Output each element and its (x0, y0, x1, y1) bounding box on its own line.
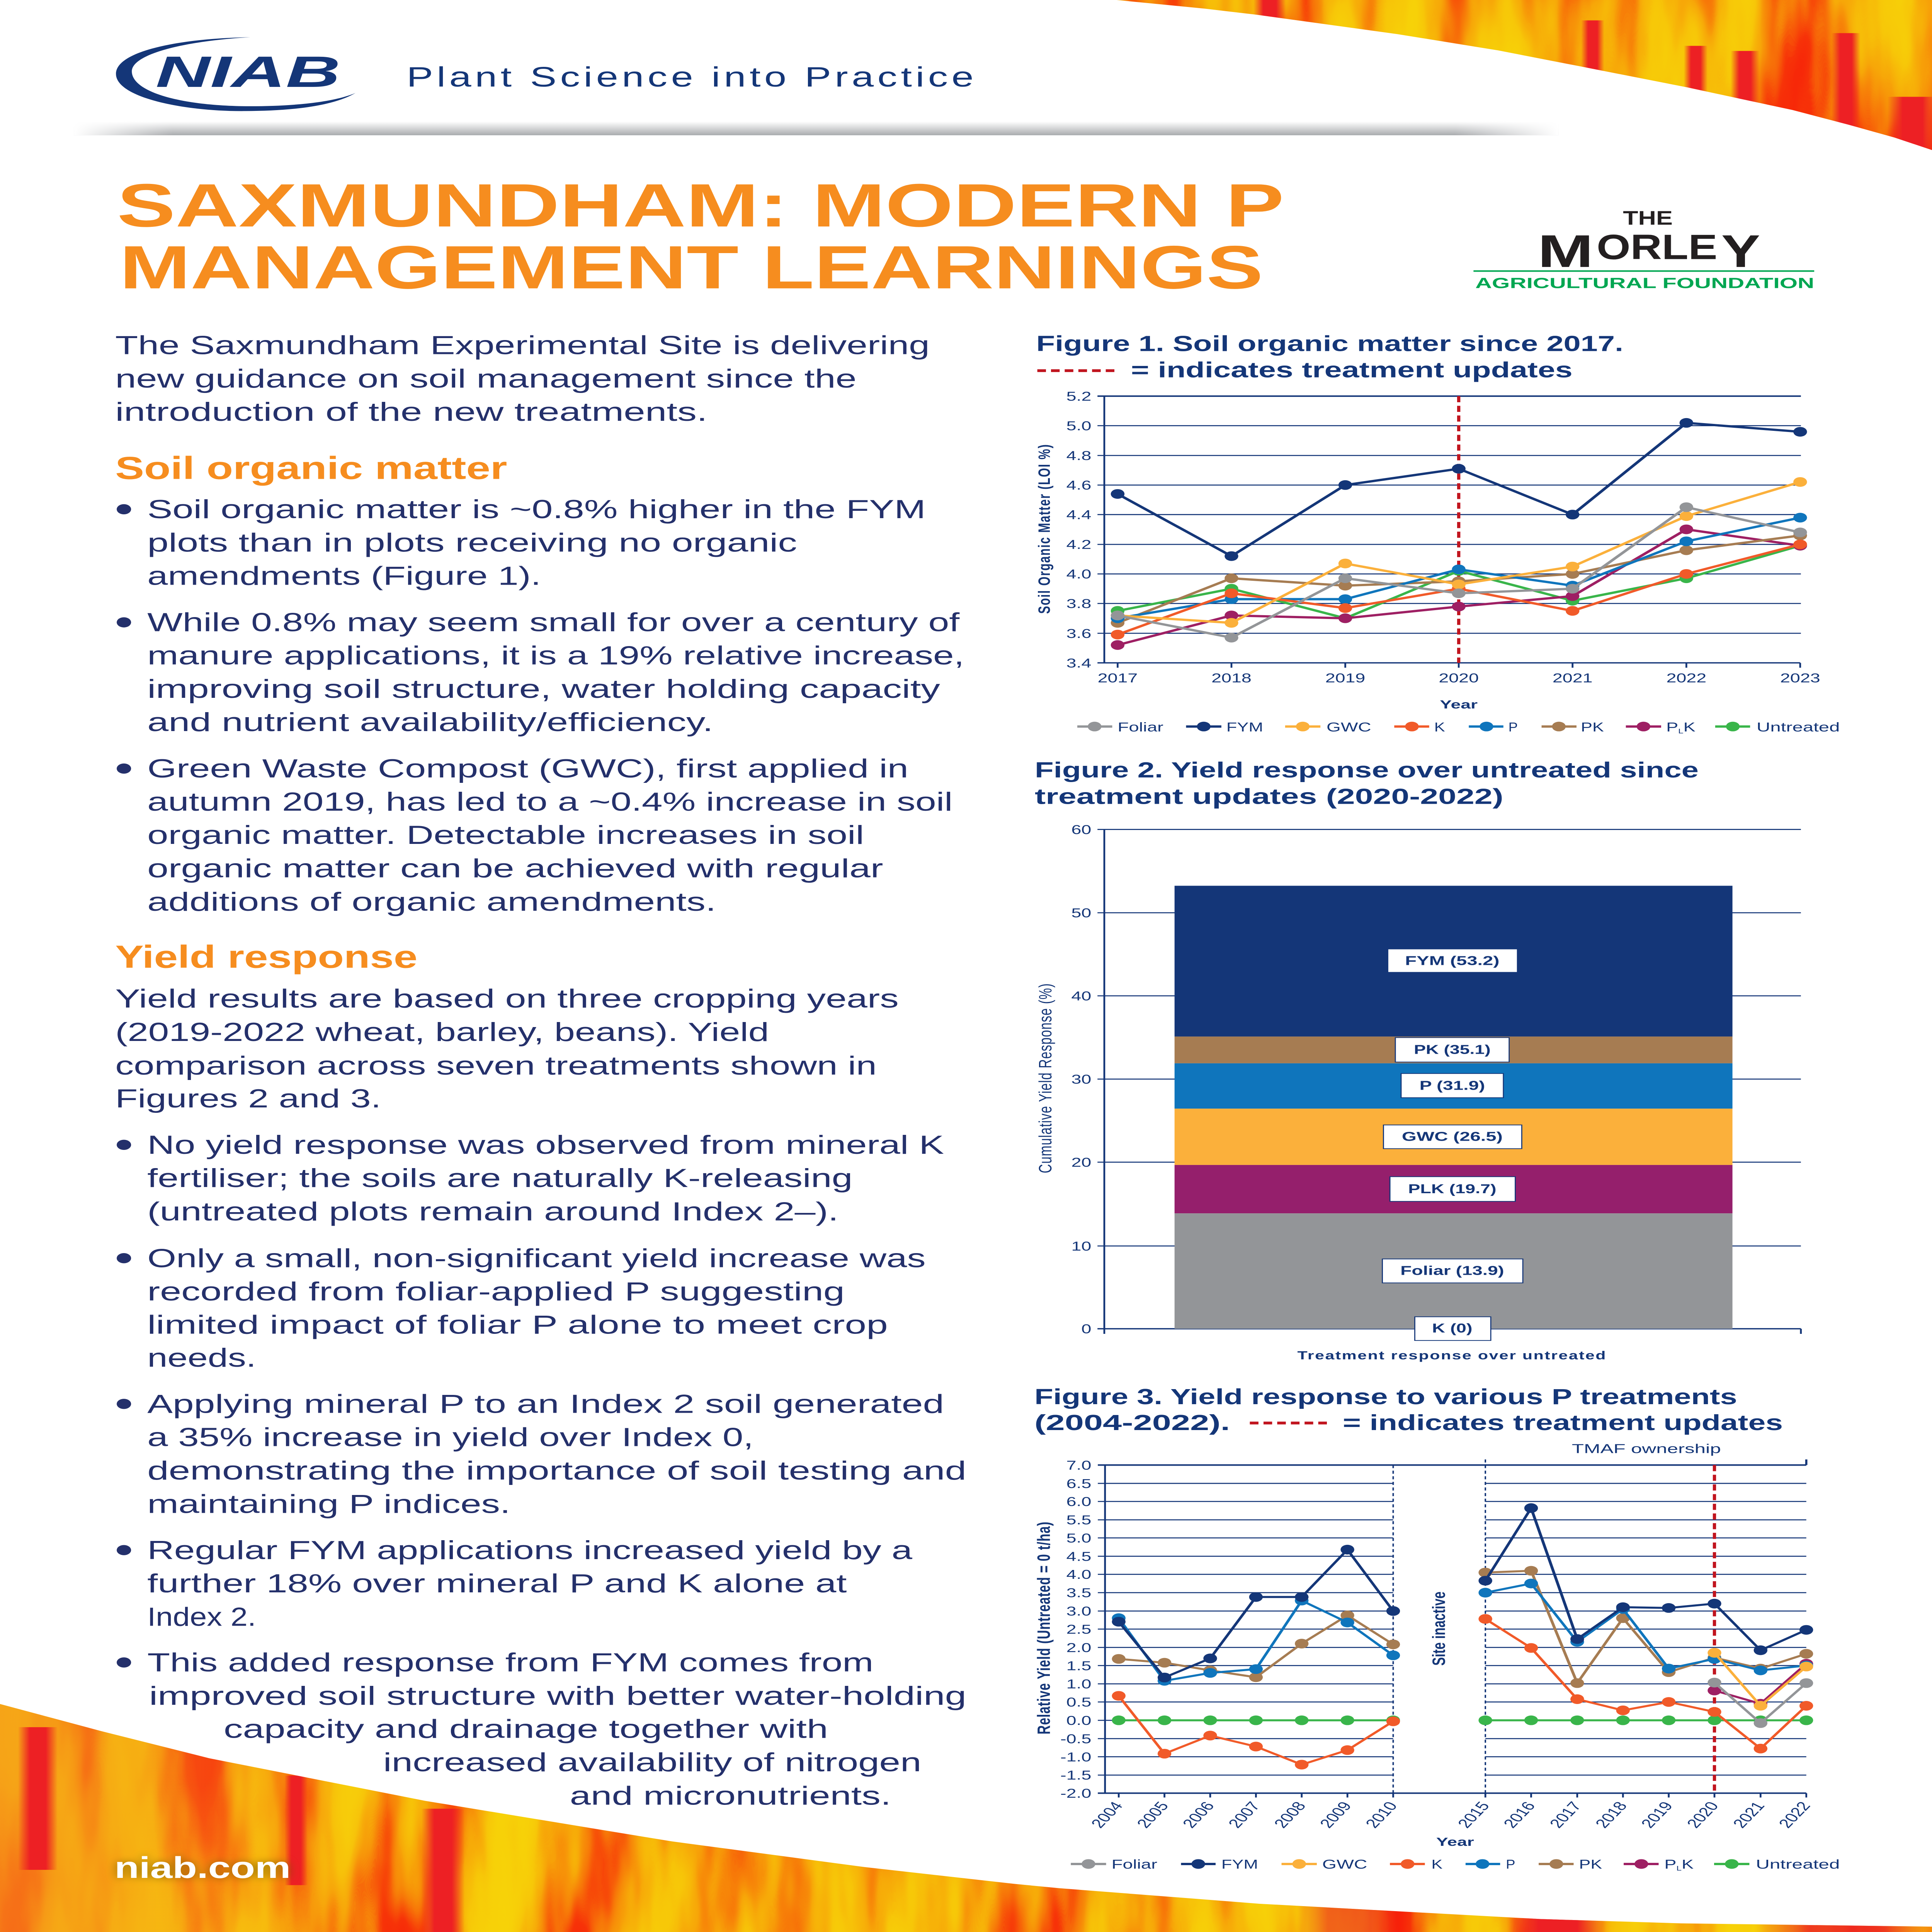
figure 1 axis titles: Soil Organic Matter (LOI %) (1035, 444, 1053, 614)
figure 2 y tick labels: 0 (1081, 1321, 1091, 1336)
figure 3 x tick labels: 2008 (1270, 1799, 1310, 1830)
figure 3 y tick labels: 0.0 (1066, 1713, 1091, 1728)
figure 2 axes and grid (1097, 830, 1801, 1334)
figure 3 legend: Untreated (1756, 1857, 1840, 1871)
series: P (1111, 513, 1807, 623)
title: SAXMUNDHAM: MODERN P (117, 172, 1284, 240)
figure 3 heading: = indicates treatment updates (1343, 1410, 1783, 1435)
figure 1 y tick labels: 3.6 (1066, 626, 1091, 641)
soil organic matter bullets: Green Waste Compost (GWC), first applied in (147, 754, 908, 783)
figure 1 legend: Untreated (1757, 720, 1840, 734)
figure 3 x tick labels: 2009 (1316, 1799, 1355, 1830)
background wheat image bottom (0, 1702, 1932, 1932)
Morley logo: AGRICULTURAL FOUNDATION (1475, 275, 1814, 291)
figure 1 y tick labels: 4.4 (1066, 507, 1091, 522)
figure 3 y tick labels: 3.5 (1066, 1585, 1091, 1600)
figure 1 heading: Figure 1. Soil organic matter since 2017. (1036, 331, 1623, 356)
bar label: PLK: PLK (19.7) (1408, 1182, 1497, 1196)
yield response bullets: recorded from foliar-applied P suggesting (147, 1277, 845, 1306)
yield response bullets: increased availability of nitrogen (383, 1748, 921, 1777)
figure 1 legend: PK (1581, 720, 1604, 734)
bar label: GWC: GWC (26.5) (1402, 1129, 1503, 1144)
figure 1 y tick labels (1066, 389, 1091, 670)
yield response bullets: improved soil structure with better water-holding (149, 1681, 966, 1711)
figure 3 legend: GWC (1322, 1857, 1367, 1871)
figure 3 heading: (2004-2022). (1034, 1410, 1230, 1435)
bar label: PLK (1390, 1177, 1515, 1201)
series: PK (1111, 531, 1807, 628)
figure 3 legend: P (1664, 1857, 1677, 1871)
series: Foliar (1111, 502, 1807, 643)
soil organic matter bullets: organic matter can be achieved with regular (147, 854, 883, 883)
soil organic matter bullets: and nutrient availability/efficiency. (147, 707, 713, 737)
figure 1 axes and grid (1097, 396, 1801, 668)
series: K (1112, 1614, 1813, 1769)
figure 1 y tick labels: 3.4 (1066, 656, 1091, 670)
figure 3 y tick labels: -1.5 (1060, 1768, 1091, 1782)
figure 2 axis titles: Cumulative Yield Response (%) (1035, 983, 1055, 1173)
intro text: The Saxmundham Experimental Site is delivering (115, 330, 930, 360)
series: GWC (1111, 477, 1807, 628)
yield response bullets: Only a small, non-significant yield increase was (147, 1243, 926, 1273)
figure 1 x tick labels (1098, 671, 1820, 685)
figure 3 x tick labels (1087, 1799, 1814, 1830)
figure 1 y tick labels: 3.8 (1066, 596, 1091, 611)
soil organic matter bullets: additions of organic amendments. (147, 887, 716, 917)
series: Foliar (1708, 1678, 1813, 1728)
intro text: introduction of the new treatments. (115, 397, 707, 427)
figure 2 heading: Figure 2. Yield response over untreated since (1035, 758, 1699, 782)
soil organic matter bullets: improving soil structure, water holding capacity (147, 674, 940, 703)
intro text: new guidance on soil management since the (115, 364, 857, 393)
figure 3 y tick labels: -1.0 (1060, 1750, 1091, 1764)
website link: niab.com (114, 1851, 291, 1884)
site inactive label: Site inactive (1429, 1592, 1449, 1666)
figure 3 x tick labels: 2007 (1224, 1799, 1264, 1830)
yield intro text: comparison across seven treatments shown in (115, 1051, 877, 1080)
bar label: FYM (1388, 949, 1517, 972)
figure 3 y tick labels: 5.5 (1066, 1513, 1091, 1527)
yield intro text: Figures 2 and 3. (115, 1084, 381, 1113)
figure 1 x tick labels: 2018 (1211, 671, 1252, 685)
figure 3 legend: FYM (1221, 1857, 1258, 1871)
figure 1 y tick labels: 4.8 (1066, 448, 1091, 463)
soil organic matter bullets: autumn 2019, has led to a ~0.4% increase in soil (147, 787, 953, 816)
figure 1 legend: FYM (1226, 720, 1263, 734)
soil organic matter bullets: amendments (Figure 1). (147, 561, 541, 590)
panel: figure 1 (1035, 331, 1840, 735)
Morley logo (1473, 207, 1814, 291)
intro text (115, 330, 930, 427)
figure 3 axis titles: Year (1436, 1835, 1474, 1849)
figure 3 y tick labels: 7.0 (1066, 1458, 1091, 1473)
NIAB logo (116, 37, 355, 111)
figure 1 heading: = indicates treatment updates (1131, 357, 1573, 382)
figure 1 legend: K (1684, 720, 1696, 734)
figure 3 y tick labels: 2.0 (1066, 1640, 1091, 1655)
figure 3 y tick labels: 0.5 (1066, 1695, 1091, 1709)
bar label: K: K (0) (1432, 1321, 1473, 1335)
bar label: Foliar (1383, 1259, 1523, 1283)
figure 2 y tick labels: 60 (1071, 822, 1091, 837)
figure 2 axis titles (1035, 983, 1605, 1362)
figure 3 x tick labels: 2005 (1133, 1799, 1172, 1830)
yield response bullets: capacity and drainage together with (224, 1714, 828, 1743)
series: PLK (1111, 524, 1807, 650)
figure 3 y tick labels: -2.0 (1060, 1786, 1091, 1801)
series: P (1112, 1579, 1813, 1685)
figure 3 x tick labels: 2020 (1683, 1799, 1723, 1830)
figure 1 legend: Foliar (1117, 720, 1163, 734)
figure 3 y tick labels: 1.0 (1066, 1677, 1091, 1691)
figure 2 heading: treatment updates (2020-2022) (1035, 784, 1503, 809)
heading: yield response: Yield response (115, 939, 417, 975)
yield response bullets: a 35% increase in yield over Index 0, (147, 1423, 753, 1452)
series: K (1111, 539, 1807, 639)
figure 1 x tick labels: 2020 (1439, 671, 1479, 685)
figure 3 x tick labels: 2010 (1361, 1799, 1401, 1830)
figure 3 legend: Foliar (1112, 1857, 1157, 1871)
yield response bullets: demonstrating the importance of soil testing and (147, 1456, 966, 1485)
yield intro text: (2019-2022 wheat, barley, beans). Yield (115, 1017, 769, 1047)
bar label: Foliar: Foliar (13.9) (1400, 1263, 1504, 1278)
figure 1 treatment update marker (1457, 396, 1461, 663)
figure 3 axis titles (1033, 1522, 1474, 1849)
figure 2 y tick labels: 10 (1071, 1239, 1091, 1253)
figure 3 y tick labels: 6.0 (1066, 1494, 1091, 1509)
yield response bullets: needs. (147, 1343, 256, 1372)
figure 1 legend (1077, 720, 1840, 735)
figure 3 legend: K (1682, 1857, 1694, 1871)
figure 3 axis titles: Relative Yield (Untreated = 0 t/ha) (1033, 1522, 1054, 1735)
series: Untreated (1112, 1716, 1813, 1725)
figure 3 heading: Figure 3. Yield response to various P treatments (1034, 1384, 1737, 1409)
figure 3 x tick labels: 2006 (1179, 1799, 1218, 1830)
figure 1 legend: GWC (1327, 720, 1371, 734)
logo wordmark: NIAB (156, 48, 340, 96)
TMAF ownership label: TMAF ownership (1572, 1441, 1721, 1456)
figure 3 x tick labels: 2021 (1729, 1799, 1769, 1830)
yield response bullets: Index 2. (147, 1602, 256, 1631)
soil organic matter bullets: plots than in plots receiving no organic (147, 528, 797, 557)
figure 3 y tick labels: 5.0 (1066, 1531, 1091, 1545)
figure 1 x tick labels: 2023 (1780, 671, 1820, 685)
yield response bullets: This added response from FYM comes from (147, 1648, 873, 1677)
series: PK (1112, 1566, 1813, 1688)
figure 3 x tick labels: 2022 (1774, 1799, 1814, 1830)
yield response bullets: No yield response was observed from mineral K (147, 1130, 944, 1160)
figure 3 y tick labels: 1.5 (1066, 1658, 1091, 1673)
figure 3 heading (1034, 1384, 1783, 1435)
figure 2 y tick labels: 20 (1071, 1155, 1091, 1170)
series: PLK (1708, 1659, 1813, 1709)
figure 1 x tick labels: 2019 (1325, 671, 1365, 685)
heading: soil organic matter: Soil organic matter (115, 451, 507, 486)
figure 2 axis titles: Treatment response over untreated (1298, 1349, 1605, 1362)
yield response bullets: (untreated plots remain around Index 2–). (147, 1197, 838, 1226)
series: GWC (1708, 1648, 1813, 1711)
stacked bar (1175, 886, 1733, 1329)
soil organic matter bullets: organic matter. Detectable increases in soil (147, 820, 864, 850)
yield intro text: Yield results are based on three cropping years (115, 984, 899, 1013)
figure 3 legend (1071, 1857, 1840, 1872)
figure 3 legend: L (1677, 1865, 1682, 1872)
yield response bullets (117, 1130, 966, 1810)
figure 3 y tick labels: 6.5 (1066, 1476, 1091, 1491)
title (117, 172, 1284, 302)
bar label: GWC (1383, 1125, 1522, 1149)
figure 3 y tick labels: 3.0 (1066, 1604, 1091, 1619)
yield response bullets: Applying mineral P to an Index 2 soil generated (147, 1389, 944, 1418)
background wheat image top right (1117, 0, 1932, 153)
figure 3 treatment update marker (1713, 1465, 1716, 1793)
figure 1 legend: P (1666, 720, 1678, 734)
panel: figure 2 (1035, 758, 1801, 1362)
yield response bullets: limited impact of foliar P alone to meet crop (147, 1310, 888, 1339)
yield response bullets: maintaining P indices. (147, 1489, 510, 1519)
figure 3 y tick labels: -0.5 (1060, 1731, 1091, 1746)
yield response bullets: and micronutrients. (570, 1781, 891, 1810)
figure 1 y tick labels: 4.6 (1066, 478, 1091, 492)
figure 3 y tick labels: 4.5 (1066, 1549, 1091, 1564)
figure 3 y tick labels: 4.0 (1066, 1567, 1091, 1582)
figure 3 axes and grid (1098, 1459, 1806, 1798)
figure 1 y tick labels: 5.0 (1066, 418, 1091, 433)
figure 1 y tick labels: 4.2 (1066, 537, 1091, 552)
figure 3 legend: K (1431, 1857, 1442, 1871)
soil organic matter bullets: While 0.8% may seem small for over a century of (147, 607, 960, 637)
Morley logo: ORLE (1597, 227, 1717, 267)
Morley logo: Y (1721, 225, 1760, 277)
series: FYM (1112, 1503, 1813, 1682)
title: MANAGEMENT LEARNINGS (119, 233, 1263, 302)
figure 1 legend: P (1509, 720, 1518, 734)
figure 3 x tick labels: 2017 (1545, 1799, 1585, 1830)
figure 1 legend: L (1678, 728, 1684, 735)
figure 3 x tick labels: 2016 (1499, 1799, 1539, 1830)
bar label: PK: PK (35.1) (1414, 1042, 1491, 1057)
yield intro text (115, 984, 899, 1113)
figure 1 x tick labels: 2017 (1098, 671, 1138, 685)
figure 2 y tick labels: 50 (1071, 906, 1091, 920)
figure 3 legend: P (1506, 1857, 1515, 1871)
yield response bullets: further 18% over mineral P and K alone at (147, 1569, 847, 1598)
soil organic matter bullets (117, 495, 964, 917)
figure 3 legend: PK (1579, 1857, 1602, 1871)
figure 2 heading (1035, 758, 1699, 809)
Morley logo: M (1537, 225, 1594, 277)
Morley logo: THE (1623, 207, 1673, 229)
figure 1 axis titles (1035, 444, 1478, 711)
figure 2 y tick labels: 30 (1071, 1072, 1091, 1087)
bar label: P (1401, 1073, 1503, 1098)
figure 1 legend: K (1434, 720, 1445, 734)
figure 1 y tick labels: 5.2 (1066, 389, 1091, 403)
figure 3 y tick labels (1060, 1458, 1091, 1801)
series: Untreated (1111, 541, 1807, 623)
series: FYM (1111, 418, 1807, 561)
bar label: K (1415, 1317, 1491, 1340)
tagline: Plant Science into Practice (406, 61, 974, 93)
panel: figure 3 (1033, 1384, 1840, 1872)
figure 3 y tick labels: 2.5 (1066, 1622, 1091, 1636)
soil organic matter bullets: Soil organic matter is ~0.8% higher in the FYM (147, 495, 926, 524)
soil organic matter bullets: manure applications, it is a 19% relative increase, (147, 641, 964, 670)
logo swoosh (116, 37, 355, 111)
bar label: P: P (31.9) (1420, 1078, 1485, 1093)
figure 2 y tick labels: 40 (1071, 989, 1091, 1003)
figure 3 x tick labels: 2019 (1637, 1799, 1677, 1830)
figure 3 x tick labels: 2015 (1454, 1799, 1493, 1830)
figure 1 x tick labels: 2022 (1666, 671, 1706, 685)
bar label: FYM: FYM (53.2) (1405, 953, 1499, 968)
figure 1 y tick labels: 4.0 (1066, 567, 1091, 582)
figure 1 x tick labels: 2021 (1553, 671, 1593, 685)
bar label: PK (1395, 1037, 1509, 1062)
figure 1 heading (1036, 331, 1623, 382)
figure 3 x tick labels: 2004 (1087, 1799, 1127, 1830)
figure 2 y tick labels (1071, 822, 1091, 1336)
yield response bullets: Regular FYM applications increased yield by a (147, 1536, 913, 1565)
yield response bullets: fertiliser; the soils are naturally K-releasing (147, 1163, 852, 1193)
figure 1 axis titles: Year (1440, 698, 1478, 711)
figure 3 x tick labels: 2018 (1591, 1799, 1631, 1830)
header shadow bar (74, 121, 1558, 135)
